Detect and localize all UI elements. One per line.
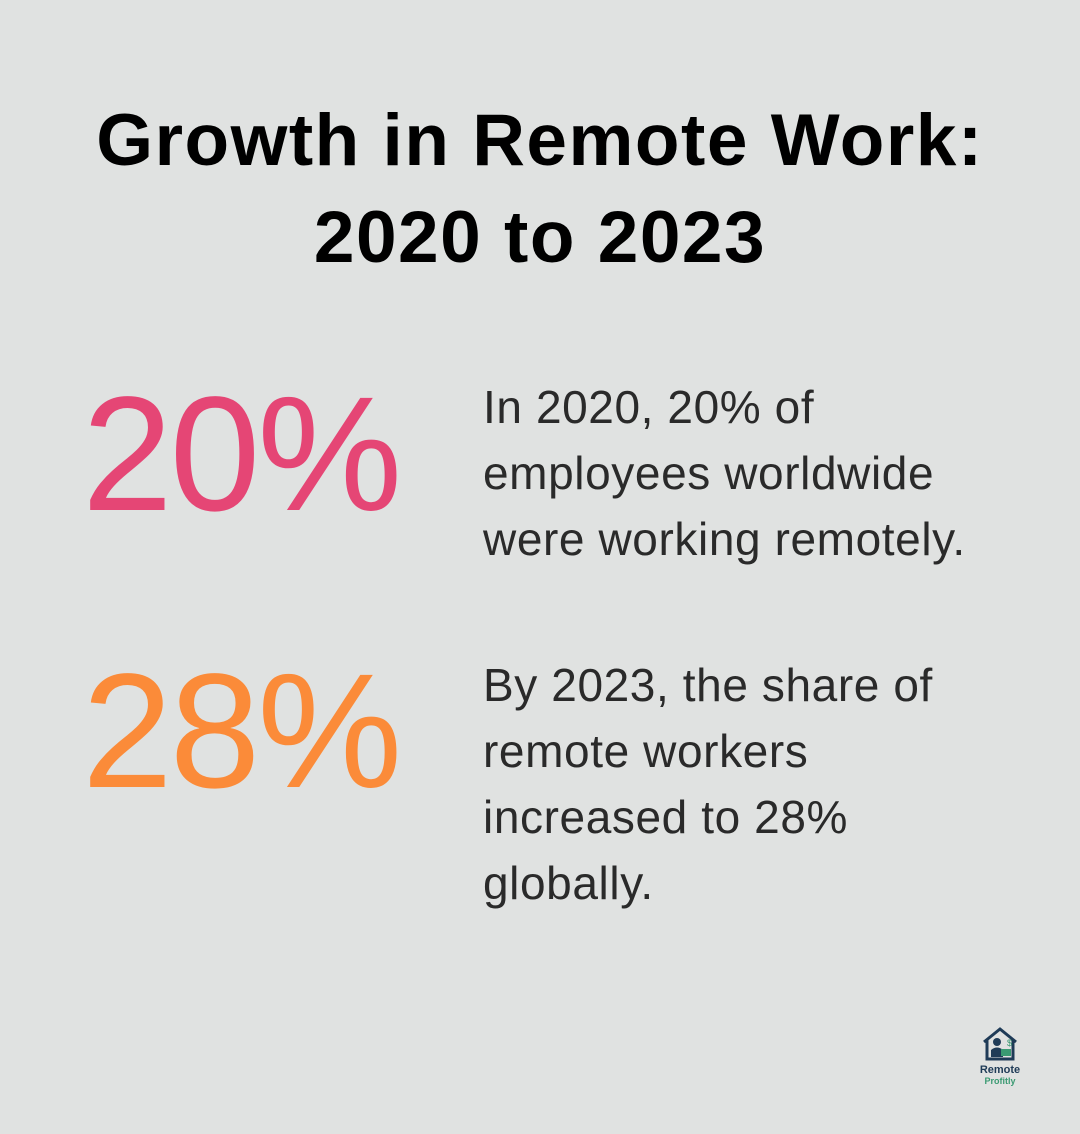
logo: Remote Profitly: Profitly — [984, 1076, 1016, 1086]
logo: Remote Profitly: Remote — [980, 1064, 1020, 1076]
text: 2023 description: By 2023, the share of — [483, 659, 933, 711]
text: 2023 description — [483, 659, 933, 909]
stat: 28%: 28% — [82, 639, 399, 822]
stat: 20%: 20% — [82, 362, 399, 545]
text: 2020 description: employees worldwide — [483, 447, 934, 499]
text: 2020 description: In 2020, 20% of — [483, 381, 814, 433]
title — [96, 100, 984, 278]
title: 2020 to 2023 — [314, 197, 766, 278]
text: 2023 description: increased to 28% — [483, 791, 848, 843]
logo: Remote Profitly: $ — [1007, 1038, 1012, 1048]
text: 2020 description — [483, 381, 966, 565]
title: Growth in Remote Work: — [96, 100, 984, 181]
text: 2023 description: remote workers — [483, 725, 808, 777]
logo: Remote Profitly — [980, 1027, 1020, 1086]
text: 2020 description: were working remotely. — [483, 513, 966, 565]
text: 2023 description: globally. — [483, 857, 654, 909]
